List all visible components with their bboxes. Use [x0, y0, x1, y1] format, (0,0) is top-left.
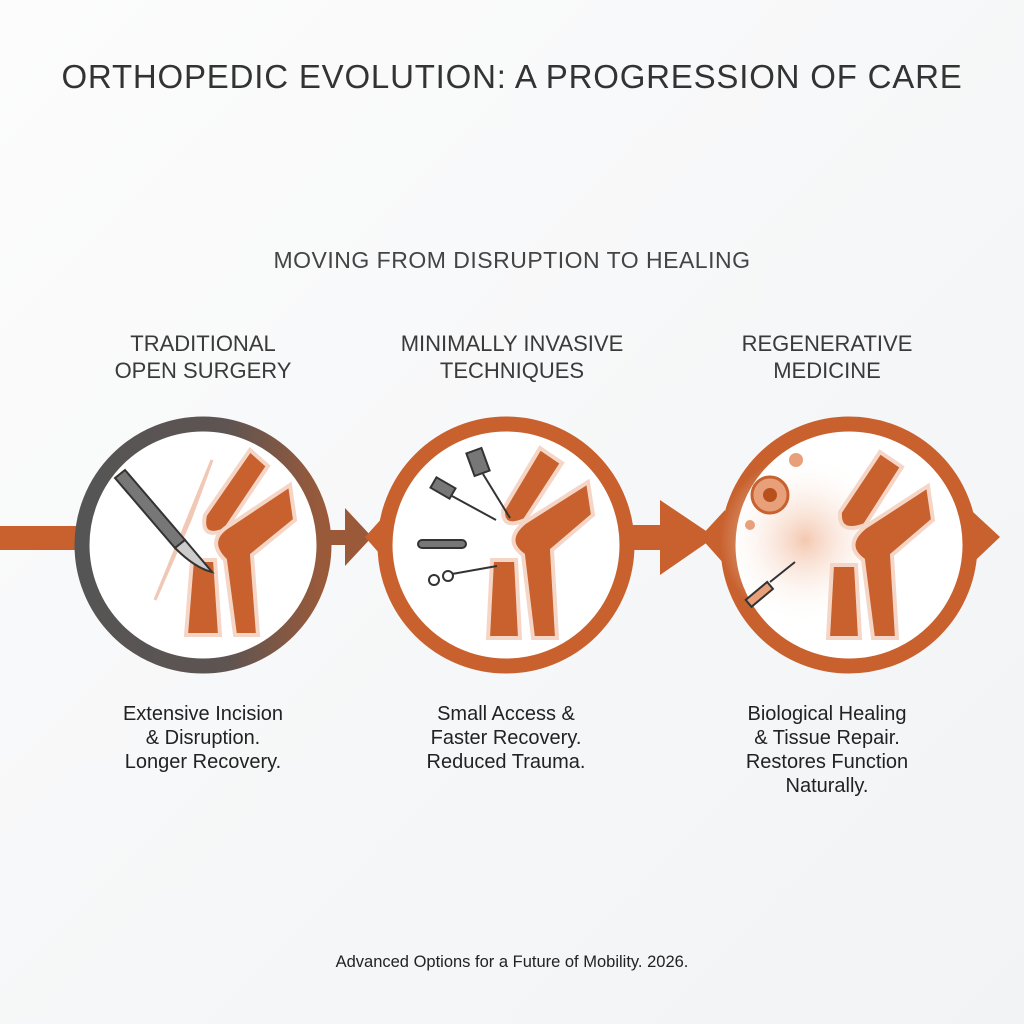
text: minimally invasive: Small Access & [437, 703, 575, 725]
heading: minimally invasive: MINIMALLY INVASIVE [401, 331, 623, 356]
subtitle: MOVING FROM DISRUPTION TO HEALING [274, 247, 750, 273]
icon: knee [488, 448, 593, 638]
heading: traditional: TRADITIONAL [130, 331, 276, 356]
text: regenerative: Naturally. [786, 775, 868, 797]
text: regenerative: & Tissue Repair. [754, 727, 900, 749]
circle 1 [82, 424, 324, 666]
arrow: 1 to 2 [320, 508, 385, 566]
text: minimally invasive [426, 703, 585, 773]
circle 2 [385, 424, 627, 666]
text: traditional [123, 703, 283, 773]
text: traditional: Extensive Incision [123, 703, 283, 725]
text: minimally invasive: Reduced Trauma. [426, 751, 585, 773]
heading: minimally invasive: TECHNIQUES [440, 358, 584, 383]
text: regenerative: Biological Healing [748, 703, 906, 725]
heading: regenerative: MEDICINE [773, 358, 881, 383]
footer: Advanced Options for a Future of Mobility. 2026. [336, 953, 688, 971]
arrow: exit [960, 500, 1000, 575]
text: traditional: Longer Recovery. [125, 751, 281, 773]
circle 3 [720, 424, 970, 666]
text: regenerative: Restores Function [746, 751, 908, 773]
arrow: entry band [0, 526, 90, 550]
arrow: 2 to 3 [620, 500, 725, 575]
icon: instruments [418, 448, 510, 585]
icon: knee [828, 452, 933, 638]
text: traditional: & Disruption. [146, 727, 260, 749]
icon: cell [752, 477, 788, 513]
heading: regenerative [742, 331, 912, 383]
icon: incision [155, 460, 212, 600]
heading: minimally invasive [401, 331, 623, 383]
heading: traditional: OPEN SURGERY [115, 358, 291, 383]
title: ORTHOPEDIC EVOLUTION: A PROGRESSION OF CARE [61, 58, 963, 95]
icon: syringe [746, 562, 795, 607]
text: regenerative [746, 703, 908, 797]
text: minimally invasive: Faster Recovery. [431, 727, 581, 749]
icon: knee [186, 450, 295, 635]
heading: regenerative: REGENERATIVE [742, 331, 912, 356]
icon: scalpel [115, 470, 212, 572]
heading: traditional [115, 331, 291, 383]
